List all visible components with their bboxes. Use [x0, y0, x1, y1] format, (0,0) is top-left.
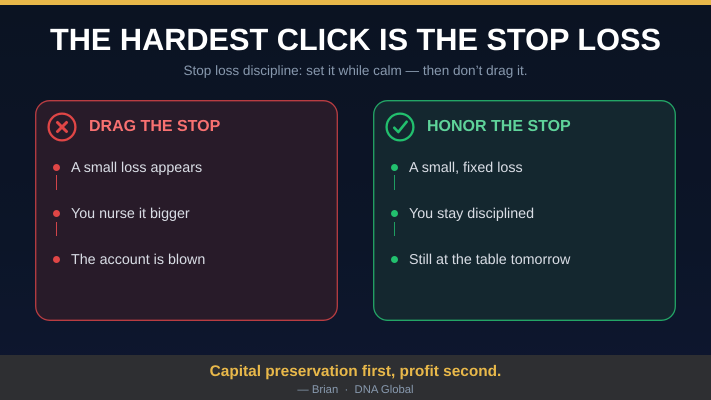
step dot 2	[53, 210, 60, 217]
top accent bar	[0, 0, 711, 4]
step: a small, fixed loss: A small, fixed loss	[409, 160, 523, 176]
step dot 1	[53, 164, 60, 171]
footer quote: Capital preservation first, profit second.	[210, 362, 501, 380]
step dot 3	[391, 256, 398, 263]
step: a small loss appears: A small loss appears	[71, 160, 202, 176]
footer band	[0, 355, 711, 400]
icon: red x in circle	[47, 112, 77, 142]
step: you nurse it bigger: You nurse it bigger	[71, 206, 190, 222]
step: still at the table tomorrow: Still at the table tomorrow	[409, 252, 570, 268]
footer attribution: — Brian · DNA Global	[297, 384, 414, 396]
step dot 2	[391, 210, 398, 217]
heading: honor the stop: HONOR THE STOP	[427, 118, 571, 134]
step: you stay disciplined: You stay disciplined	[409, 206, 534, 222]
panel: drag the stop	[35, 100, 338, 321]
step dot 3	[53, 256, 60, 263]
connector 2	[394, 222, 395, 236]
icon: green check in circle	[385, 112, 415, 142]
connector 1	[56, 175, 57, 190]
title: THE HARDEST CLICK IS THE STOP LOSS	[50, 22, 661, 56]
step: the account is blown: The account is blown	[71, 252, 205, 268]
panel: honor the stop	[373, 100, 676, 321]
heading: drag the stop: DRAG THE STOP	[89, 118, 220, 134]
subtitle: Stop loss discipline: set it while calm — then don’t drag it.	[183, 62, 528, 78]
step dot 1	[391, 164, 398, 171]
connector 2	[56, 222, 57, 236]
connector 1	[394, 175, 395, 190]
